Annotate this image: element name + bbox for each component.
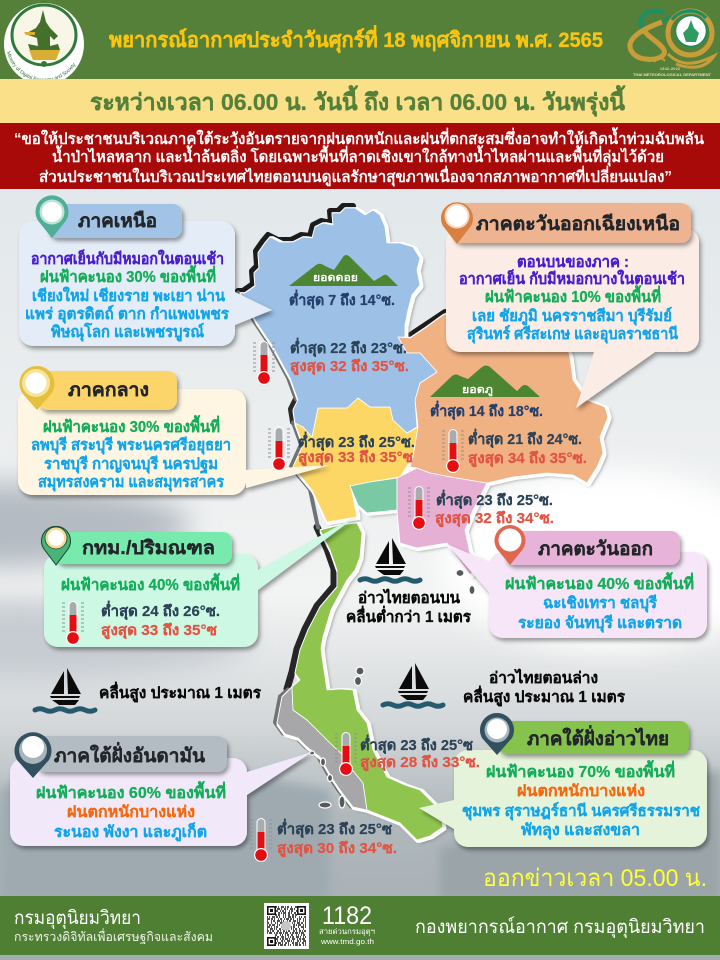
logo: 80th anniversary: THAI METEOROLOGICAL DEPARTMENT <box>633 73 712 77</box>
callout body <box>446 228 699 408</box>
text block: สมุทรสงคราม และสมุทรสาคร <box>38 474 225 492</box>
icon: pin <box>36 195 68 238</box>
text block: ฝนฟ้าคะนอง 30% ของพื้นที่ <box>40 265 216 286</box>
header pill <box>48 204 182 238</box>
temperatures: east: สูงสุด 32 ถึง 34°ซ. <box>435 510 554 527</box>
icon: pin <box>41 526 71 565</box>
text block: สุรินทร์ ศรีสะเกษ และอุบลราชธานี <box>467 325 678 344</box>
icon: pin <box>20 366 55 410</box>
mountain: ยอดภู <box>430 366 540 397</box>
text block: ฝนฟ้าคะนอง 10% ของพื้นที่ <box>485 285 661 306</box>
region: east (pink) <box>397 468 487 575</box>
panel: Bangkok and vicinity <box>41 515 358 647</box>
header band <box>0 0 720 83</box>
icon: boat andaman <box>35 668 95 711</box>
callout body <box>44 515 358 647</box>
issue time: ออกข่าวเวลา 05.00 น. <box>483 865 707 892</box>
hotline: www.tmd.go.th <box>320 939 374 946</box>
text block: ระยอง จันทบุรี และตราด <box>518 614 682 633</box>
footer band <box>0 896 720 955</box>
warning text: “ขอให้ประชาชนบริเวณภาคใต้ระวังอันตรายจากฝนตกหนักและฝนที่ตกสะสมซึ่งอาจทำให้เกิดน้ำท่วมฉับพลัน <box>14 127 704 148</box>
icon: boat upper gulf <box>360 538 420 581</box>
icon: boat lower gulf <box>383 663 443 706</box>
wave text: lower gulf: อ่าวไทยตอนล่าง <box>489 668 598 687</box>
panel: northeast <box>441 202 699 408</box>
temperatures: north: ต่ำสุด 22 ถึง 23°ซ. <box>290 337 407 357</box>
temperatures: central <box>298 431 415 466</box>
text block: อากาศเย็น กับมีหมอกบางในตอนเช้า <box>459 268 685 288</box>
icon: pin <box>495 525 525 565</box>
header pill <box>36 736 227 772</box>
icon: thermometer gulf <box>335 732 357 776</box>
mountain: ยอดภู: ยอดภู <box>462 384 493 397</box>
warning text <box>14 127 704 188</box>
text block: เลย ชัยภูมิ นครราชสีมา บุรีรัมย์ <box>472 307 672 327</box>
department name: กรมอุตุนิยมวิทยา <box>14 908 141 930</box>
icon: pin <box>480 713 514 755</box>
logo: ministry <box>4 3 84 79</box>
text block: ฝนฟ้าคะนอง 40% ของพื้นที่ <box>505 572 694 593</box>
logo: 80th anniversary <box>630 11 714 83</box>
icon: thermometer <box>62 601 84 645</box>
icon: pin <box>14 732 52 778</box>
text block <box>25 248 230 343</box>
heading: ภาคตะวันออกเฉียงเหนือ <box>476 213 680 235</box>
heading: ภาคใต้ฝั่งอ่าวไทย <box>527 725 669 750</box>
temperatures: northeast: ต่ำสุด 21 ถึง 24°ซ. <box>468 428 582 448</box>
text block: ระนอง พังงา และภูเก็ต <box>54 821 207 843</box>
hotline <box>319 902 375 946</box>
header pill <box>498 721 689 754</box>
text block: ฝนฟ้าคะนอง 30% ของพื้นที่ <box>43 415 220 436</box>
text block: ลพบุรี สระบุรี พระนครศรีอยุธยา <box>31 436 231 455</box>
warning band <box>0 123 720 189</box>
region: central (yellow) <box>293 398 418 522</box>
temperatures <box>101 600 220 639</box>
warning text: ส่วนประชาชนในบริเวณประเทศไทยตอนบนดูแลรักษาสุขภาพเนื่องจากสภาพอากาศที่เปลี่ยนแปลง” <box>39 165 672 188</box>
panel: central <box>18 366 330 495</box>
text line: ฝนฟ้าคะนอง 40% ของพื้นที่ <box>61 573 240 594</box>
map of Thailand <box>240 208 608 840</box>
panel: south Andaman <box>10 732 312 846</box>
text block: ตอนบนของภาค : <box>517 254 629 271</box>
temperatures: east: ต่ำสุด 23 ถึง 25°ซ. <box>436 489 553 509</box>
temperatures: south andaman <box>277 818 397 857</box>
time heading: ระหว่างเวลา 06.00 น. วันนี้ ถึง เวลา 06.00 น. วันพรุ่งนี้ <box>90 85 626 117</box>
department name: กระทรวงดิจิทัลเพื่อเศรษฐกิจและสังคม <box>14 928 213 944</box>
wave text: upper gulf: คลื่นต่ำกว่า 1 เมตร <box>346 605 472 626</box>
region: south Gulf (green) <box>292 523 443 840</box>
text block <box>505 572 694 633</box>
forecast division: กองพยากรณ์อากาศ กรมอุตุนิยมวิทยา <box>415 916 705 939</box>
text block: แพร่ อุตรดิตถ์ ตาก กำแพงเพชร <box>25 305 230 324</box>
temperatures: north mountain: ต่ำสุด 7 ถึง 14°ซ. <box>289 289 395 309</box>
temperatures: south gulf: สูงสุด 28 ถึง 33°ซ. <box>360 754 480 771</box>
icon: pin <box>441 202 473 244</box>
callout body <box>10 752 312 846</box>
QR code <box>264 903 309 949</box>
icon: thermometer northeast <box>442 429 464 473</box>
text block: ฝนตกหนักบางแห่ง <box>67 804 195 821</box>
text block: ฝนฟ้าคะนอง 60% ของพื้นที่ <box>36 781 226 802</box>
text block: ราชบุรี กาญจนบุรี นครปฐม <box>44 455 218 474</box>
wave text: upper gulf <box>346 588 472 626</box>
department name <box>14 908 213 944</box>
heading: ภาคใต้ฝั่งอันดามัน <box>54 742 205 767</box>
islands <box>310 570 475 808</box>
temperatures: south gulf <box>360 734 480 771</box>
text block: อากาศเย็นกับมีหมอกในตอนเช้า <box>31 248 224 268</box>
text block: พัทลุง และสงขลา <box>521 822 640 840</box>
header pill <box>38 371 177 410</box>
heading: กทม./ปริมณฑล <box>82 538 215 559</box>
callout body <box>18 389 330 495</box>
heading: ภาคตะวันออก <box>538 539 653 560</box>
text block: พิษณุโลก และเพชรบูรณ์ <box>51 322 205 343</box>
panel: east <box>447 525 707 638</box>
warning text: น้ำป่าไหลหลาก และน้ำล้นตลิ่ง โดยเฉพาะพื้นที่ลาดเชิงเขาใกล้ทางน้ำไหลผ่านและพื้นที่ลุ่มไว้ด้วย <box>52 145 664 167</box>
mountain: ยอดดอย <box>289 255 398 286</box>
temperatures: สูงสุด 33 ถึง 35°ซ <box>101 622 217 639</box>
icon: thermometer north <box>253 341 275 385</box>
time band <box>0 79 720 123</box>
temperatures: northeast mountain: ต่ำสุด 14 ถึง 18°ซ. <box>430 400 543 420</box>
temperatures: north: สูงสุด 32 ถึง 35°ซ. <box>290 358 409 375</box>
logo: 80th anniversary: 1942-2022 <box>660 67 680 71</box>
text block <box>462 760 700 840</box>
text block <box>31 415 231 492</box>
coast shadow: west <box>238 206 445 806</box>
temperatures: northeast: สูงสุด 34 ถึง 35°ซ. <box>468 450 587 467</box>
hotline: 1182 <box>322 902 372 930</box>
wave text: lower gulf <box>463 668 626 708</box>
region: north (blue) <box>240 208 437 437</box>
icon: thermometer central <box>268 427 290 471</box>
temperatures: central: สูงสุด 33 ถึง 35°ซ <box>298 449 413 466</box>
title: พยากรณ์อากาศประจำวันศุกร์ที่ 18 พฤศจิกายน พ.ศ. 2565 <box>109 24 603 54</box>
text block: เชียงใหม่ เชียงราย พะเยา น่าน <box>32 286 225 305</box>
callout body <box>19 221 272 346</box>
text block: ฉะเชิงเทรา ชลบุรี <box>543 594 658 613</box>
logo: ministry: Ministry of Digital Economy and Society <box>7 51 76 79</box>
icon: thermometer andaman <box>250 818 272 862</box>
icon: thermometer east <box>408 486 430 530</box>
region: south Andaman (gray) <box>277 687 367 810</box>
panel: north <box>19 195 272 346</box>
header pill <box>505 531 680 565</box>
region: Bangkok (teal) <box>350 478 397 513</box>
temperatures: south andaman: สูงสุด 30 ถึง 34°ซ. <box>277 840 397 857</box>
callout body <box>447 544 707 638</box>
text block <box>36 781 226 843</box>
text block: ชุมพร สุราษฎร์ธานี นครศรีธรรมราช <box>462 802 700 821</box>
logo: 80th anniversary: 80th Anniversary <box>652 79 687 83</box>
panel: south Gulf <box>419 713 707 847</box>
temperatures: northeast <box>468 428 587 467</box>
wave text: lower gulf: คลื่นสูง ประมาณ 1 เมตร <box>463 685 626 708</box>
heading: ภาคเหนือ <box>78 210 157 232</box>
header pill <box>55 532 232 564</box>
heading: ภาคกลาง <box>68 380 149 401</box>
text block: ฝนตกหนักบางแห่ง <box>517 783 645 800</box>
temperatures: north <box>290 337 409 375</box>
temperatures: east <box>435 489 554 527</box>
wave text: andaman: คลื่นสูง ประมาณ 1 เมตร <box>99 681 262 704</box>
text block <box>459 254 685 344</box>
region: northeast (orange) <box>398 298 608 483</box>
hotline: สายด่วนกรมอุตุฯ <box>319 927 375 936</box>
wave text: upper gulf: อ่าวไทยตอนบน <box>358 588 460 607</box>
temperatures: south andaman: ต่ำสุด 23 ถึง 25°ซ <box>277 818 392 838</box>
text block: ฝนฟ้าคะนอง 70% ของพื้นที่ <box>486 760 675 781</box>
temperatures: central: ต่ำสุด 23 ถึง 25°ซ. <box>298 431 415 451</box>
temperatures: south gulf: ต่ำสุด 23 ถึง 25°ซ <box>360 734 473 754</box>
temperatures: ต่ำสุด 24 ถึง 26°ซ. <box>101 600 220 620</box>
callout body <box>419 750 707 847</box>
mountain: ยอดดอย: ยอดดอย <box>313 272 358 284</box>
header pill <box>452 203 691 243</box>
